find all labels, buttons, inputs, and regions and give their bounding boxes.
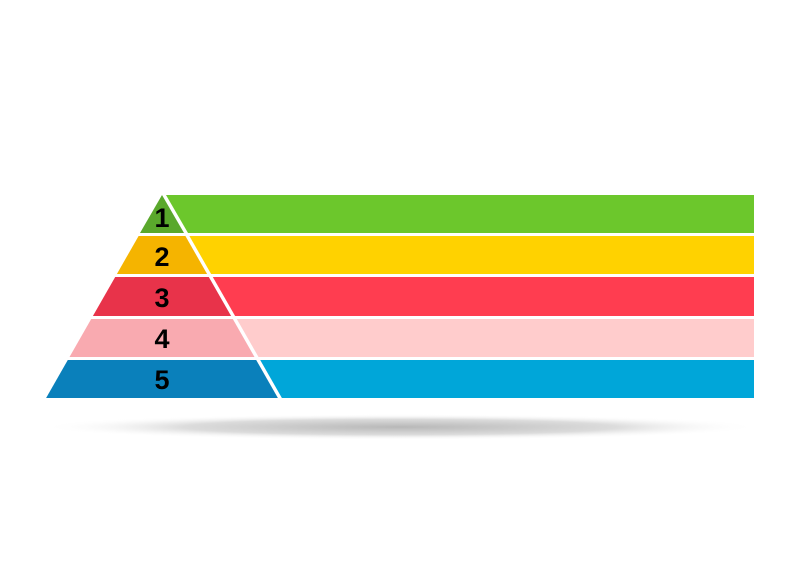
band 3: 3 bbox=[154, 283, 170, 313]
band 5: 5 bbox=[154, 365, 170, 395]
band 4 bbox=[70, 319, 754, 357]
band 2 bbox=[117, 236, 754, 274]
band 4: 4 bbox=[154, 324, 170, 354]
shadow bbox=[40, 414, 760, 440]
band 2: 2 bbox=[154, 242, 170, 272]
band 3 bbox=[93, 277, 754, 316]
band 5 bbox=[46, 360, 754, 398]
band 1: 1 bbox=[154, 203, 170, 233]
band 1 bbox=[140, 195, 754, 233]
